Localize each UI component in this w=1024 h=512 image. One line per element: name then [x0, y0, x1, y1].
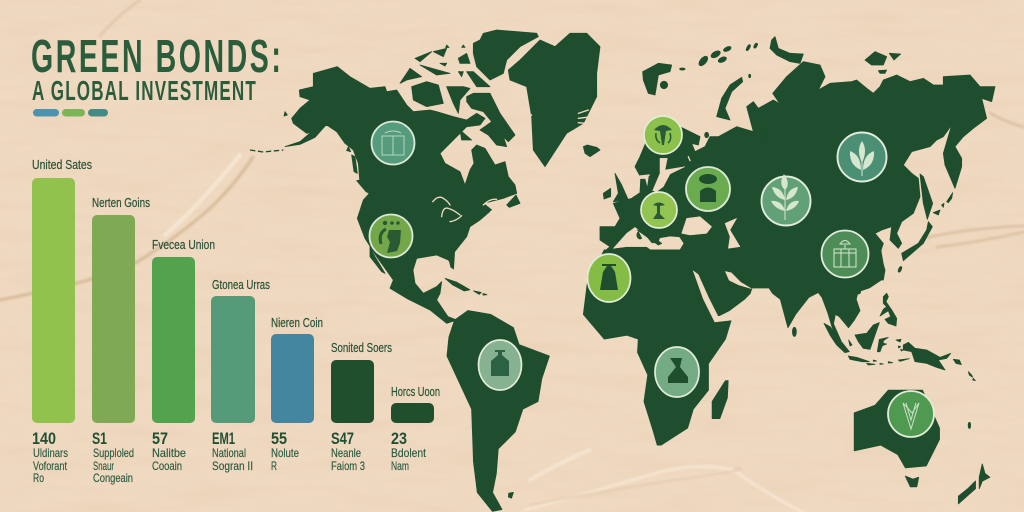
bar: Nerten Goins: Nerten Goins: [92, 196, 150, 210]
accent pills: [33, 109, 108, 116]
bar chart: [32, 158, 440, 485]
marker: Australia: [888, 391, 934, 437]
North America mainland: [292, 67, 517, 323]
Baja California: [370, 247, 385, 273]
Great Britain: [613, 173, 628, 202]
marker: Eastern Europe: [686, 167, 730, 211]
marker: Central Asia: [762, 174, 810, 226]
bar: Sonited Soers: S47: [331, 429, 354, 448]
bar: Horcs Uoon: 23: [391, 429, 407, 448]
Severnaya Zemlya: [770, 37, 803, 63]
Kuril islands: [933, 193, 953, 215]
Southeast Asia islands: [824, 289, 975, 381]
marker: Northern China: [838, 132, 886, 182]
Sri Lanka: [793, 327, 796, 336]
bar: Horcs Uoon: Bdolent: [391, 446, 427, 460]
bar: United States: United Sates: [32, 158, 92, 172]
bar: Nieren Coin: Nieren Coin: [271, 316, 323, 330]
Australia: [854, 390, 939, 468]
North America and Arctic: [250, 30, 600, 323]
bar: Gtonea Urras: Gtonea Urras: [212, 278, 270, 292]
Ellesmere Island: [473, 30, 538, 80]
Italy and Mediterranean islands: [637, 230, 662, 245]
New Zealand: [958, 464, 990, 504]
bar: United States: 140: [32, 429, 56, 448]
Africa and South Asia: [583, 250, 883, 445]
Arctic archipelago: [284, 45, 490, 152]
Tasmania: [905, 476, 919, 487]
Aleutian chain: [250, 150, 283, 152]
Pacific coastal islands: [352, 155, 369, 193]
bar: Fvecea Union: Fvecea Union: [152, 238, 215, 252]
Franz Josef Land: [680, 43, 758, 138]
Greenland inlets: [527, 110, 588, 123]
marker: South America: [478, 340, 522, 390]
bar: United States: Voforant: [33, 459, 68, 473]
Nova Scotia: [507, 195, 520, 207]
bar: Nerten Goins: [92, 196, 150, 485]
Black Sea: [682, 217, 712, 235]
Florida: [447, 250, 455, 269]
bar: Gtonea Urras: Sogran II: [212, 459, 253, 473]
bar: Horcs Uoon: Horcs Uoon: [391, 385, 440, 399]
Caspian Sea: [725, 218, 740, 248]
Persian Gulf: [725, 272, 751, 289]
bar: Gtonea Urras: [211, 278, 270, 473]
Bear Island: [660, 81, 668, 89]
bar: Nieren Coin: Nolute: [271, 446, 299, 460]
New Guinea: [903, 342, 951, 370]
bar: Nerten Goins: Supploled: [93, 446, 134, 460]
Eurasia mainland: [600, 62, 995, 280]
bar: United States: Uldinars: [33, 446, 68, 460]
Greenland: [508, 33, 600, 167]
bar: Nerten Goins: S1: [92, 429, 107, 448]
bar: Gtonea Urras: National: [212, 446, 246, 460]
marker: United States: [370, 214, 412, 258]
bar: Nerten Goins: Snaur: [93, 459, 114, 473]
Borneo: [855, 323, 879, 349]
marker: Canada: [372, 122, 414, 164]
marker: China: [822, 230, 868, 278]
bar: Fvecea Union: [152, 238, 215, 473]
Sakhalin strip: [920, 174, 933, 219]
Map marker icons: [370, 116, 934, 437]
bar: Nieren Coin: [271, 316, 323, 473]
Philippines: [880, 293, 897, 326]
title: GREEN BONDS:: [31, 31, 281, 83]
Sulawesi: [877, 337, 888, 352]
New Siberian Islands: [865, 52, 901, 73]
Iceland: [583, 145, 600, 157]
South America: [447, 311, 549, 511]
world map: [250, 30, 995, 511]
Moluccas and New Britain: [849, 339, 975, 381]
bar: Fvecea Union: Nalitbe: [152, 446, 186, 460]
bar: Sonited Soers: [331, 341, 392, 473]
Novaya Zemlya: [717, 77, 743, 120]
bar: United States: Ro: [33, 471, 44, 485]
bar: Nieren Coin: R: [271, 459, 277, 473]
Caribbean islands: [445, 278, 513, 498]
Madagascar: [712, 381, 728, 419]
bar: Horcs Uoon: Nam: [391, 459, 409, 473]
White Sea and Kola detail: [640, 157, 690, 176]
bar: Fvecea Union: Cooain: [152, 459, 182, 473]
subtitle: A GLOBAL INVESTMENT: [32, 75, 256, 106]
Java and Lesser Sunda: [848, 356, 909, 365]
marker: West Africa: [588, 254, 630, 302]
Africa, South Asia, South America, Oceania: [445, 250, 990, 511]
bar: Horcs Uoon: [391, 385, 440, 473]
bar: Fvecea Union: 57: [152, 429, 168, 448]
Eurasia: [600, 37, 995, 280]
bar: Nerten Goins: Congeain: [93, 471, 133, 485]
Mediterranean Sea: [613, 227, 698, 262]
bar: Sonited Soers: Faiom 3: [331, 459, 365, 473]
Red Sea: [693, 271, 733, 322]
bar: Gtonea Urras: EM1: [212, 429, 235, 448]
Baltic Sea: [653, 158, 685, 192]
bar: Sonited Soers: Sonited Soers: [331, 341, 392, 355]
Hainan: [856, 289, 861, 294]
Ireland: [603, 188, 611, 199]
Svalbard: [643, 63, 672, 95]
bar: Sonited Soers: Neanle: [331, 446, 361, 460]
Alaska Peninsula: [285, 125, 326, 147]
bar: United States: [32, 158, 92, 485]
marker: Western Europe: [641, 192, 677, 228]
marker: Scandinavia: [644, 116, 682, 154]
Baffin Island: [467, 93, 515, 147]
Small Japanese island: [898, 266, 902, 273]
Great Lakes: [433, 197, 498, 222]
Sumatra: [824, 323, 849, 353]
Pacific islet: [968, 422, 971, 428]
bar: Nieren Coin: 55: [271, 429, 287, 448]
Japan: [902, 222, 932, 261]
marker: Central Africa: [655, 347, 699, 397]
